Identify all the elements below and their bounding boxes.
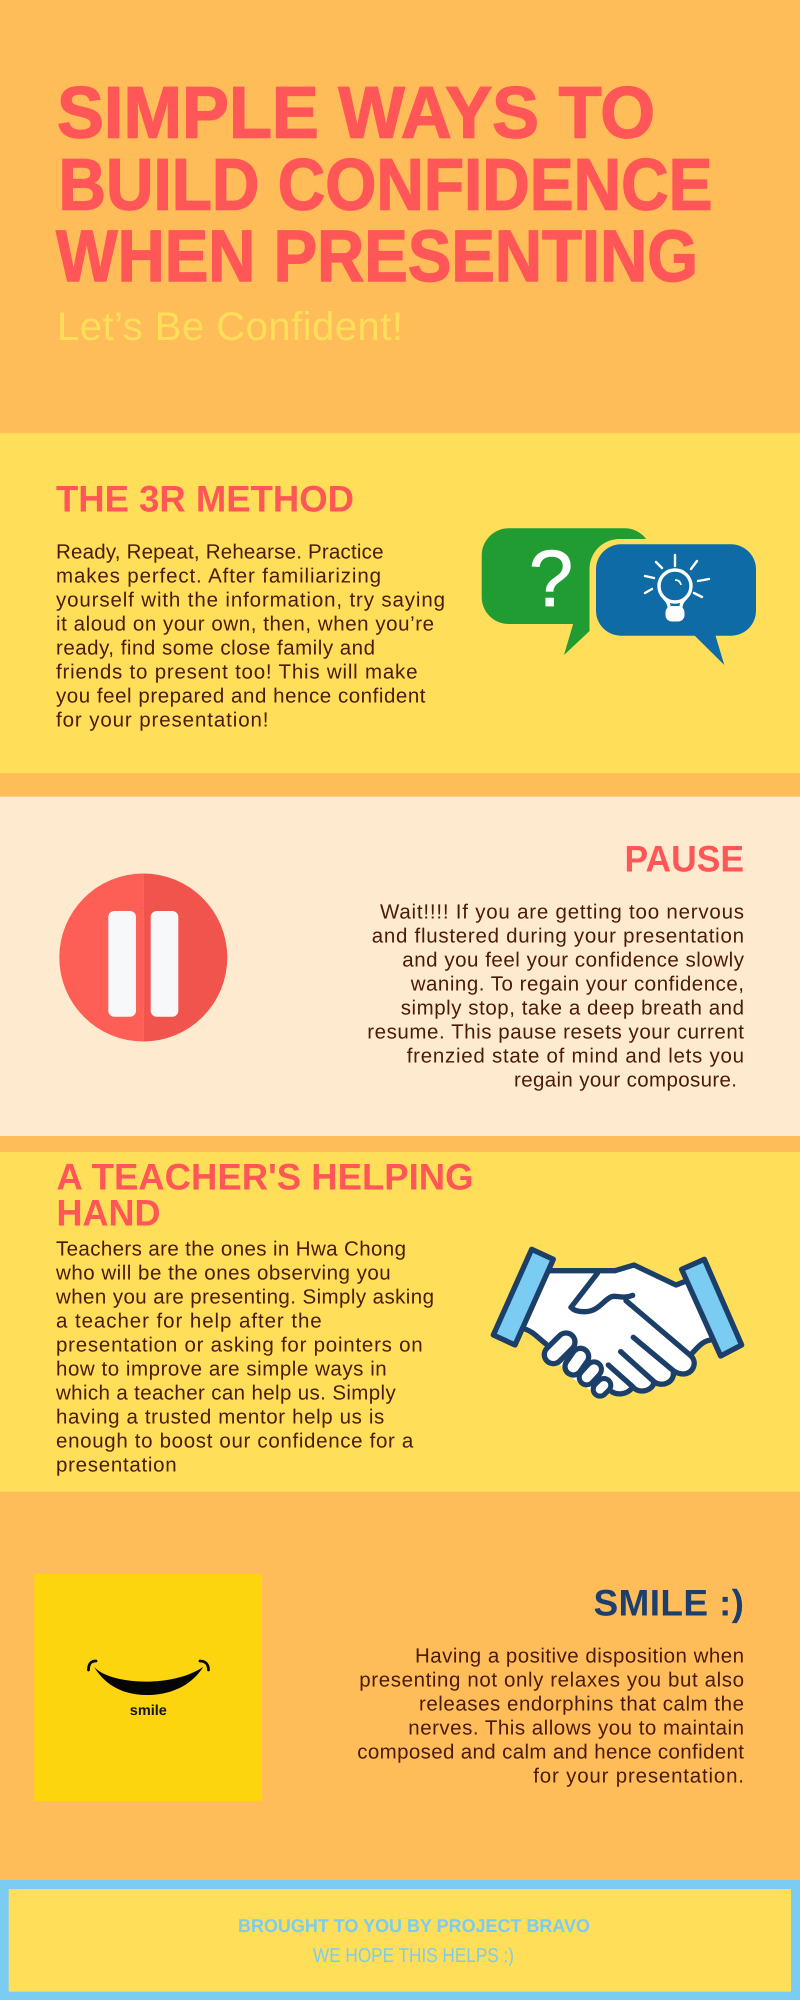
title <box>56 72 712 297</box>
text block: pause body: Wait!!!! If you are getting too nervous <box>380 901 744 924</box>
panel: pause <box>0 797 800 1136</box>
heading: the 3R method: THE 3R METHOD <box>56 479 354 520</box>
text block: teacher body: how to improve are simple ways in <box>56 1358 387 1381</box>
text block: teacher body: who will be the ones observing you <box>55 1262 391 1285</box>
text block: pause body <box>367 901 745 1092</box>
text block: 3R method body: Ready, Repeat, Rehearse. Practice <box>56 540 384 563</box>
text block: teacher body: presentation <box>56 1454 177 1477</box>
smile caption: smile <box>130 1703 167 1719</box>
title: WHEN PRESENTING <box>56 216 698 297</box>
text block: teacher body: when you are presenting. Simply asking <box>55 1286 434 1309</box>
text block: smile body: releases endorphins that calm the <box>419 1693 744 1716</box>
text block: pause body: waning. To regain your confidence, <box>410 973 744 996</box>
title: SIMPLE WAYS TO <box>57 72 655 154</box>
text block: 3R method body: ready, find some close family and <box>56 636 375 659</box>
icon: speech bubbles with question mark and light bulb <box>482 528 780 665</box>
footer credit: BROUGHT TO YOU BY PROJECT BRAVO <box>238 1915 590 1936</box>
panel: a teacher's helping hand <box>0 1152 800 1492</box>
panel: header <box>56 72 712 349</box>
text block: 3R method body: for your presentation! <box>56 708 268 731</box>
text block: pause body: resume. This pause resets your current <box>367 1021 744 1044</box>
gap around blue bubble <box>590 539 780 659</box>
text block: teacher body: which a teacher can help us. Simply <box>55 1382 396 1405</box>
heading: a teacher's helping hand <box>56 1156 474 1233</box>
text block: teacher body: a teacher for help after the <box>56 1310 322 1333</box>
text block: pause body: simply stop, take a deep breath and <box>401 997 744 1020</box>
text block: smile body: composed and calm and hence confident <box>357 1741 744 1764</box>
text block: teacher body: enough to boost our confidence for a <box>56 1430 414 1453</box>
heading: pause: PAUSE <box>624 839 744 880</box>
icon: pause button <box>59 874 227 1042</box>
subtitle: Let’s Be Confident! <box>57 305 403 349</box>
text block: 3R method body: makes perfect. After familiarizing <box>56 564 381 587</box>
text block: smile body <box>357 1645 744 1788</box>
panel: the 3R method <box>0 433 800 773</box>
panel: smile <box>34 1574 744 1801</box>
text block: smile body: presenting not only relaxes you but also <box>359 1669 744 1692</box>
blue idea bubble <box>596 544 756 665</box>
text block: 3R method body: friends to present too! This will make <box>56 660 418 683</box>
text block: 3R method body <box>56 540 445 731</box>
icon: handshake <box>493 1249 742 1394</box>
text block: smile body: for your presentation. <box>533 1765 744 1788</box>
heading: a teacher's helping hand: HAND <box>56 1192 160 1233</box>
text block: 3R method body: yourself with the information, try saying <box>56 588 445 611</box>
text block: teacher body: Teachers are the ones in Hwa Chong <box>56 1238 406 1261</box>
heading: a teacher's helping hand: A TEACHER'S HELPING <box>56 1156 474 1197</box>
smile mouth <box>88 1661 208 1695</box>
text block: teacher body: presentation or asking for pointers on <box>56 1334 423 1357</box>
text block: 3R method body: you feel prepared and hence confident <box>56 684 426 707</box>
text block: pause body: and you feel your confidence slowly <box>402 949 745 972</box>
panel: footer <box>0 1880 800 2000</box>
text block: 3R method body: it aloud on your own, then, when you’re <box>56 612 434 635</box>
text block: pause body: frenzied state of mind and lets you <box>407 1045 744 1068</box>
text block: teacher body <box>55 1238 434 1477</box>
title: BUILD CONFIDENCE <box>58 144 712 226</box>
green question bubble: ? <box>529 534 573 623</box>
heading: smile: SMILE :) <box>594 1583 744 1624</box>
text block: smile body: Having a positive disposition when <box>415 1645 744 1668</box>
footer message: WE HOPE THIS HELPS :) <box>313 1945 514 1967</box>
text block: smile body: nerves. This allows you to maintain <box>408 1717 744 1740</box>
text block: pause body: regain your composure. <box>514 1069 737 1092</box>
green question bubble <box>482 528 652 655</box>
text block: teacher body: having a trusted mentor help us is <box>56 1406 384 1429</box>
image: smile logo <box>34 1574 262 1801</box>
text block: pause body: and flustered during your presentation <box>372 925 744 948</box>
